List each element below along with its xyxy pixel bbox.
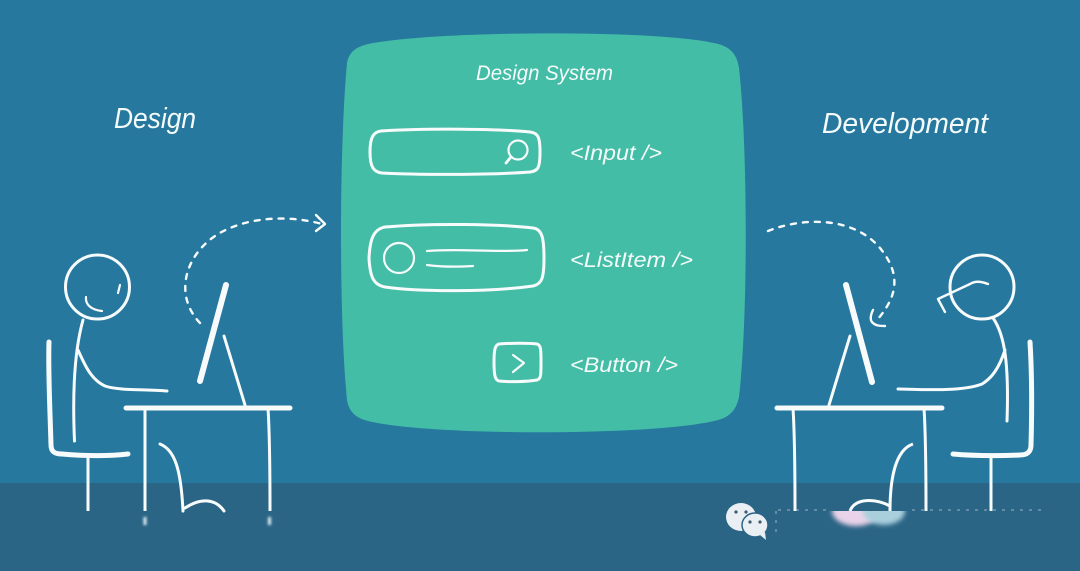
developer figure at desk xyxy=(777,255,1032,511)
face xyxy=(86,285,120,311)
arrow: design to system xyxy=(185,215,325,323)
arm xyxy=(898,350,1005,390)
monitor xyxy=(846,285,872,382)
head xyxy=(66,255,130,319)
arrow: system to development xyxy=(768,222,894,326)
chair stem xyxy=(86,456,90,511)
label: list item: <ListItem /> xyxy=(570,249,693,272)
desk legs xyxy=(145,408,270,511)
component: button xyxy=(494,343,541,382)
desk legs xyxy=(793,408,926,511)
designer figure at desk xyxy=(49,255,290,511)
chair xyxy=(49,342,128,456)
bubble tail xyxy=(760,532,766,540)
heading: design: Design xyxy=(114,103,196,135)
arm xyxy=(78,350,167,391)
floor band xyxy=(0,483,1080,571)
heading: development: Development xyxy=(822,108,990,140)
desk top xyxy=(126,406,290,410)
chair stem xyxy=(990,456,992,511)
front bubble xyxy=(742,513,768,537)
monitor xyxy=(200,285,226,381)
leg and foot xyxy=(850,444,913,511)
back bubble xyxy=(726,503,756,531)
panel title: Design System xyxy=(476,62,613,85)
body xyxy=(74,320,83,441)
glasses xyxy=(938,282,988,312)
icon: chat bubbles xyxy=(726,503,768,540)
bubble eyes xyxy=(734,510,762,524)
leg and foot xyxy=(160,444,224,511)
head xyxy=(950,255,1014,319)
label: input: <Input /> xyxy=(570,142,662,165)
body xyxy=(993,318,1007,421)
monitor stand xyxy=(829,336,850,405)
watermark blur xyxy=(828,511,908,530)
desk top xyxy=(777,406,942,410)
floor fade marks xyxy=(144,517,271,525)
monitor stand xyxy=(224,336,245,405)
panel background xyxy=(341,33,746,432)
component: input box xyxy=(370,129,540,174)
watermark dashes xyxy=(776,510,1045,533)
panel: design system xyxy=(341,33,746,432)
chair xyxy=(953,342,1032,456)
component: list item xyxy=(369,224,544,291)
label: button: <Button /> xyxy=(570,354,678,377)
